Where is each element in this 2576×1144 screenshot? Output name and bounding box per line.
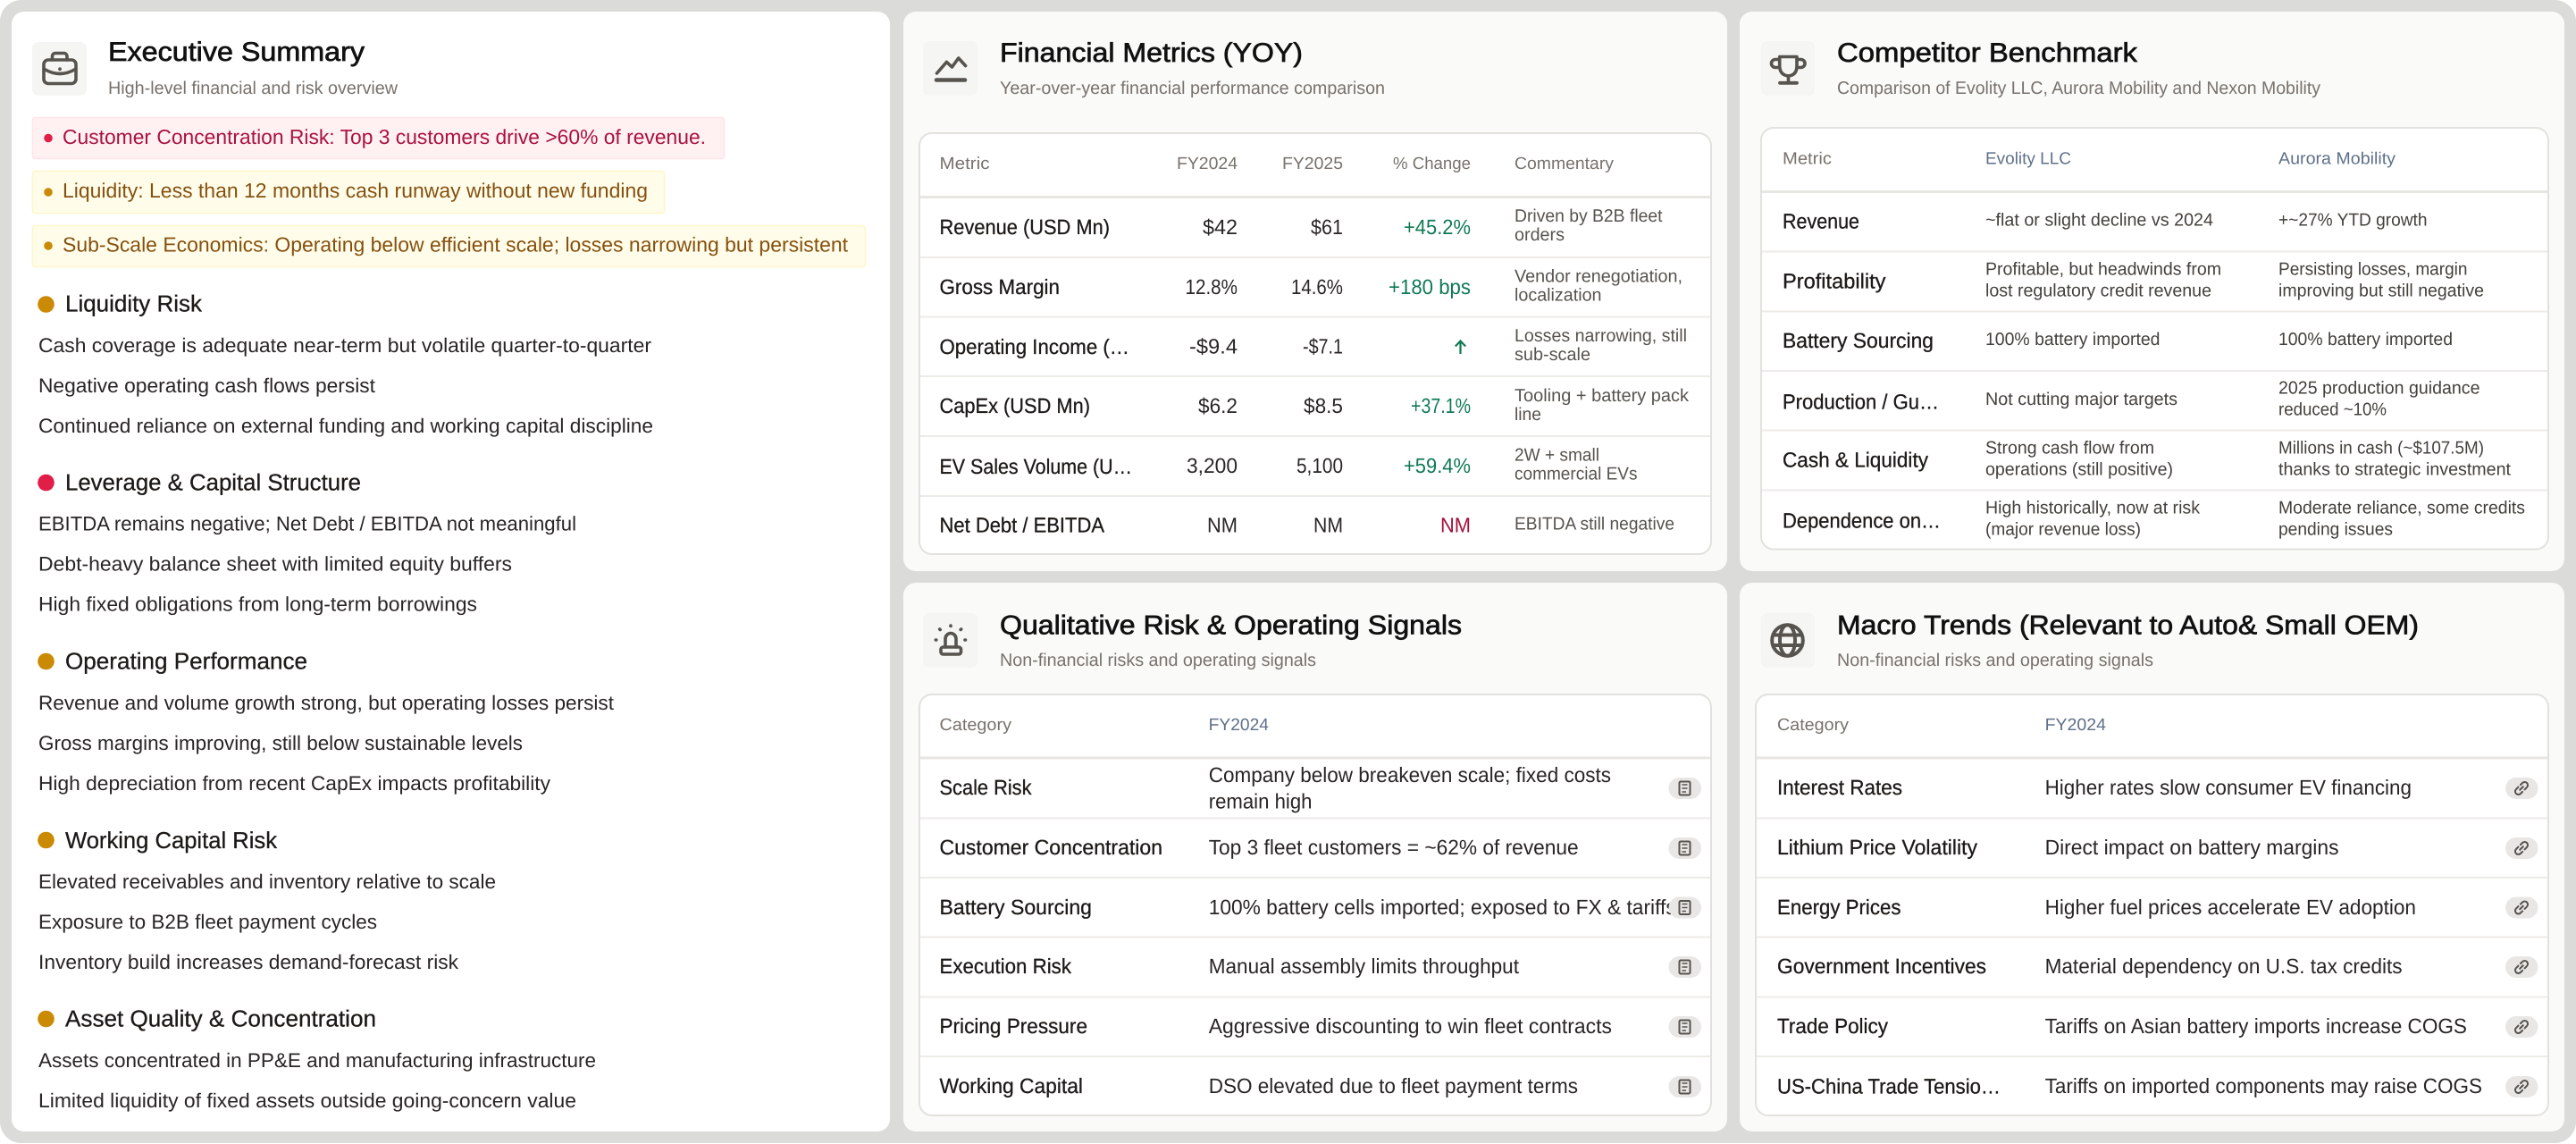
icon: briefcase bbox=[32, 42, 87, 96]
callout: sub-scale economics bbox=[32, 225, 865, 266]
table header: Aurora Mobility bbox=[2278, 150, 2396, 168]
panel: qualitative risk and operating signals bbox=[903, 583, 1727, 1131]
row: us-china trade tensions: Tariffs on imported components may raise COGS bbox=[2045, 1074, 2482, 1098]
icon: link bbox=[2505, 897, 2538, 919]
row: profitability: lost regulatory credit revenue bbox=[1985, 281, 2211, 300]
row: battery sourcing: Battery Sourcing bbox=[940, 896, 1092, 919]
row: interest rates bbox=[1777, 776, 2538, 799]
table header bbox=[940, 716, 1269, 735]
table: macro trends bbox=[1756, 694, 2548, 1115]
row: interest rates: Higher rates slow consumer EV financing bbox=[2045, 776, 2412, 799]
row: capex: +37.1% bbox=[1411, 394, 1471, 417]
row: cash and liquidity: Cash & Liquidity bbox=[1783, 449, 1928, 472]
callout: liquidity: Liquidity: Less than 12 months cash runway without new funding bbox=[63, 179, 648, 202]
row: revenue: $61 bbox=[1311, 215, 1343, 239]
row: revenue: +45.2% bbox=[1404, 215, 1471, 239]
row: revenue: Revenue bbox=[1783, 209, 1859, 232]
row: trade policy bbox=[1777, 1014, 2538, 1038]
icon: trophy bbox=[1761, 41, 1815, 96]
row: profitability: Profitable, but headwinds from bbox=[1985, 259, 2221, 279]
table header bbox=[940, 155, 1615, 173]
row: operating income: -$7.1 bbox=[1303, 334, 1343, 358]
table header: Metric bbox=[940, 155, 990, 173]
section: liquidity risk: Negative operating cash flows persist bbox=[38, 374, 376, 397]
row: gross margin: 12.8% bbox=[1185, 275, 1238, 299]
row: net debt bbox=[940, 513, 1674, 536]
table header: FY2024 bbox=[1177, 155, 1238, 173]
row: cash and liquidity: Strong cash flow from bbox=[1985, 438, 2154, 458]
row: capex bbox=[940, 386, 1690, 425]
callout: liquidity bbox=[32, 172, 665, 213]
row: working capital: DSO elevated due to fleet payment terms bbox=[1209, 1074, 1578, 1098]
row: revenue: Revenue (USD Mn) bbox=[940, 215, 1110, 239]
row: profitability: Persisting losses, margin bbox=[2278, 259, 2468, 279]
section: liquidity risk bbox=[38, 290, 653, 437]
row: ev sales volume: 2W + small bbox=[1515, 445, 1599, 465]
section: liquidity risk: Liquidity Risk bbox=[65, 290, 203, 316]
row: production guidance: Not cutting major targets bbox=[1985, 390, 2177, 409]
panel: macro trends bbox=[1740, 583, 2564, 1131]
table header bbox=[1783, 150, 2396, 168]
row: customer concentration: Customer Concentration bbox=[940, 836, 1162, 859]
row: dependence: Moderate reliance, some credits bbox=[2278, 499, 2525, 518]
section: working capital risk: Working Capital Risk bbox=[65, 827, 278, 854]
row: revenue: +~27% YTD growth bbox=[2278, 211, 2427, 231]
table header: FY2025 bbox=[1282, 155, 1343, 173]
section: leverage and capital structure bbox=[38, 468, 576, 615]
row: revenue bbox=[940, 206, 1663, 245]
table: financial metrics bbox=[919, 133, 1711, 554]
row: revenue: Driven by B2B fleet bbox=[1515, 206, 1663, 226]
row: energy prices: Higher fuel prices accelerate EV adoption bbox=[2045, 896, 2416, 919]
table: qualitative risk bbox=[919, 694, 1711, 1115]
callout: customer concentration risk: Customer Concentration Risk: Top 3 customers drive >60% of revenue. bbox=[63, 125, 706, 148]
row: dependence: Dependence on… bbox=[1783, 509, 1941, 533]
row: government incentives bbox=[1777, 955, 2538, 978]
row: ev sales volume bbox=[940, 445, 1637, 484]
heading: financial metrics: Financial Metrics (YOY) bbox=[1000, 38, 1303, 68]
row: ev sales volume: 5,100 bbox=[1296, 454, 1343, 477]
subtitle: competitor benchmark: Comparison of Evolity LLC, Aurora Mobility and Nexon Mobility bbox=[1837, 79, 2320, 98]
row: gross margin bbox=[940, 266, 1682, 306]
section: asset quality and concentration: Assets concentrated in PP&E and manufacturing infrastructure bbox=[38, 1049, 596, 1072]
icon: globe bbox=[1761, 613, 1815, 668]
row: net debt: Net Debt / EBITDA bbox=[940, 513, 1104, 536]
row: revenue: orders bbox=[1515, 225, 1565, 245]
row: government incentives: Material dependency on U.S. tax credits bbox=[2045, 955, 2403, 978]
table header: Commentary bbox=[1515, 155, 1615, 173]
table header: FY2024 bbox=[1209, 716, 1269, 735]
table header bbox=[1777, 716, 2106, 735]
icon: link bbox=[2505, 1076, 2538, 1098]
row: cash and liquidity bbox=[1783, 438, 2511, 479]
icon: document bbox=[1669, 1016, 1701, 1038]
icon: link bbox=[2505, 778, 2538, 799]
section: operating performance: High depreciation from recent CapEx impacts profitability bbox=[38, 772, 551, 795]
row: capex: $8.5 bbox=[1304, 394, 1343, 417]
row: us-china trade tensions: US-China Trade Tensio… bbox=[1777, 1074, 2001, 1098]
row: customer concentration bbox=[940, 836, 1701, 859]
row: gross margin: Vendor renegotiation, bbox=[1515, 266, 1682, 286]
section: leverage and capital structure: Leverage & Capital Structure bbox=[65, 468, 361, 495]
subtitle: executive summary: High-level financial and risk overview bbox=[108, 79, 399, 98]
row: dependence: (major revenue loss) bbox=[1985, 520, 2141, 540]
row: scale risk: Scale Risk bbox=[940, 776, 1032, 799]
row: cash and liquidity: Millions in cash (~$107.5M) bbox=[2278, 438, 2484, 458]
row: ev sales volume: EV Sales Volume (U… bbox=[940, 455, 1132, 478]
section: asset quality and concentration bbox=[38, 1005, 596, 1112]
table header: FY2024 bbox=[2045, 716, 2106, 735]
row: gross margin: localization bbox=[1515, 286, 1601, 306]
row: gross margin: +180 bps bbox=[1389, 275, 1471, 299]
row: cash and liquidity: thanks to strategic investment bbox=[2278, 459, 2511, 479]
row: gross margin: Gross Margin bbox=[940, 275, 1060, 299]
row: scale risk: remain high bbox=[1209, 790, 1312, 813]
row: us-china trade tensions bbox=[1777, 1074, 2538, 1098]
icon: document bbox=[1669, 837, 1701, 859]
section: working capital risk: Inventory build increases demand-forecast risk bbox=[38, 951, 459, 973]
row: production guidance bbox=[1783, 379, 2480, 420]
row: profitability bbox=[1783, 259, 2484, 300]
icon: document bbox=[1669, 778, 1701, 799]
row: trade policy: Trade Policy bbox=[1777, 1014, 1888, 1038]
row: lithium price volatility: Lithium Price Volatility bbox=[1777, 836, 1977, 859]
row: working capital: Working Capital bbox=[940, 1074, 1083, 1098]
table header: Evolity LLC bbox=[1985, 150, 2071, 168]
heading: competitor benchmark: Competitor Benchmark bbox=[1837, 38, 2138, 68]
section: working capital risk: Elevated receivables and inventory relative to scale bbox=[38, 871, 496, 893]
row: battery sourcing: 100% battery imported bbox=[1985, 330, 2161, 349]
row: working capital bbox=[940, 1074, 1701, 1098]
callout: sub-scale economics: Sub-Scale Economics: Operating below efficient scale; losses narrowing but persistent bbox=[63, 232, 849, 256]
row: interest rates: Interest Rates bbox=[1777, 776, 1902, 799]
row: capex: Tooling + battery pack bbox=[1515, 386, 1690, 406]
row: net debt: NM bbox=[1440, 513, 1471, 536]
row: trade policy: Tariffs on Asian battery imports increase COGS bbox=[2045, 1014, 2467, 1038]
callout: customer concentration risk bbox=[32, 118, 724, 159]
row: capex: line bbox=[1515, 405, 1541, 425]
icon: line chart bbox=[923, 41, 978, 96]
row: dependence: pending issues bbox=[2278, 520, 2393, 540]
row: net debt: NM bbox=[1313, 513, 1343, 536]
row: production guidance: 2025 production guidance bbox=[2278, 379, 2480, 399]
row: pricing pressure: Pricing Pressure bbox=[940, 1014, 1087, 1038]
row: government incentives: Government Incentives bbox=[1777, 955, 1986, 978]
icon: document bbox=[1669, 956, 1701, 978]
icon: document bbox=[1669, 897, 1701, 919]
subtitle: macro trends: Non-financial risks and operating signals bbox=[1837, 651, 2153, 670]
row: pricing pressure bbox=[940, 1014, 1701, 1038]
section: working capital risk: Exposure to B2B fleet payment cycles bbox=[38, 911, 377, 933]
row: production guidance: Production / Gu… bbox=[1783, 390, 1939, 413]
row: ev sales volume: commercial EVs bbox=[1515, 465, 1637, 484]
section: leverage and capital structure: High fixed obligations from long-term borrowings bbox=[38, 593, 477, 615]
section: asset quality and concentration: Asset Quality & Concentration bbox=[65, 1005, 376, 1031]
row: dependence bbox=[1783, 499, 2525, 540]
row: energy prices: Energy Prices bbox=[1777, 896, 1901, 919]
row: operating income bbox=[940, 326, 1687, 365]
subtitle: financial metrics: Year-over-year financial performance comparison bbox=[1000, 79, 1385, 98]
section: liquidity risk: Continued reliance on external funding and working capital discipline bbox=[38, 415, 653, 437]
row: capex: CapEx (USD Mn) bbox=[940, 394, 1090, 417]
row: battery sourcing bbox=[940, 896, 1701, 919]
icon: link bbox=[2505, 837, 2538, 859]
row: customer concentration: Top 3 fleet customers = ~62% of revenue bbox=[1209, 836, 1579, 859]
row: battery sourcing: Battery Sourcing bbox=[1783, 329, 1934, 352]
row: pricing pressure: Aggressive discounting to win fleet contracts bbox=[1209, 1014, 1612, 1038]
table: competitor benchmark bbox=[1761, 128, 2548, 549]
row: energy prices bbox=[1777, 896, 2538, 919]
row: operating income: sub-scale bbox=[1515, 345, 1590, 365]
section: operating performance: Gross margins improving, still below sustainable levels bbox=[38, 732, 523, 754]
row: ev sales volume: +59.4% bbox=[1404, 454, 1471, 477]
row: battery sourcing bbox=[1783, 329, 2453, 352]
row: execution risk: Manual assembly limits throughput bbox=[1209, 955, 1519, 978]
row: scale risk bbox=[940, 763, 1701, 813]
row: operating income: -$9.4 bbox=[1189, 334, 1238, 358]
panel: competitor benchmark bbox=[1740, 12, 2564, 571]
arrow: up bbox=[1456, 341, 1465, 354]
row: battery sourcing: 100% battery imported bbox=[2278, 330, 2453, 349]
section: operating performance: Operating Performance bbox=[65, 647, 307, 674]
section: liquidity risk: Cash coverage is adequate near-term but volatile quarter-to-quarter bbox=[38, 334, 652, 357]
icon: document bbox=[1669, 1076, 1701, 1098]
row: revenue: ~flat or slight decline vs 2024 bbox=[1985, 211, 2213, 231]
row: profitability: Profitability bbox=[1783, 270, 1886, 293]
section: asset quality and concentration: Limited liquidity of fixed assets outside going-concern value bbox=[38, 1089, 576, 1112]
icon: link bbox=[2505, 956, 2538, 978]
row: dependence: High historically, now at risk bbox=[1985, 499, 2201, 518]
subtitle: qualitative risk: Non-financial risks and operating signals bbox=[1000, 651, 1316, 670]
section: operating performance bbox=[38, 647, 615, 795]
row: revenue bbox=[1783, 209, 2427, 232]
icon: link bbox=[2505, 1016, 2538, 1038]
row: revenue: $42 bbox=[1203, 215, 1238, 239]
row: operating income: Losses narrowing, still bbox=[1515, 326, 1687, 346]
row: gross margin: 14.6% bbox=[1291, 275, 1343, 299]
table header: % Change bbox=[1393, 155, 1471, 173]
row: net debt: NM bbox=[1207, 513, 1238, 536]
row: scale risk: Company below breakeven scale; fixed costs bbox=[1209, 763, 1611, 786]
section: working capital risk bbox=[38, 827, 496, 973]
row: net debt: EBITDA still negative bbox=[1515, 515, 1674, 534]
row: battery sourcing: 100% battery cells imported; exposed to FX & tariffs bbox=[1209, 896, 1676, 919]
table header: Metric bbox=[1783, 150, 1832, 168]
row: cash and liquidity: operations (still positive) bbox=[1985, 459, 2173, 479]
row: ev sales volume: 3,200 bbox=[1187, 454, 1238, 477]
row: lithium price volatility bbox=[1777, 836, 2538, 859]
row: operating income: Operating Income (… bbox=[940, 335, 1129, 358]
row: lithium price volatility: Direct impact on battery margins bbox=[2045, 836, 2339, 859]
heading: executive summary: Executive Summary bbox=[108, 38, 365, 67]
row: profitability: improving but still negative bbox=[2278, 281, 2484, 300]
panel: executive summary bbox=[12, 12, 890, 1131]
row: production guidance: reduced ~10% bbox=[2278, 400, 2387, 420]
section: operating performance: Revenue and volume growth strong, but operating losses persist bbox=[38, 692, 615, 714]
row: execution risk bbox=[940, 955, 1701, 978]
section: leverage and capital structure: Debt-heavy balance sheet with limited equity buffers bbox=[38, 552, 512, 576]
heading: qualitative risk: Qualitative Risk & Operating Signals bbox=[1000, 611, 1462, 640]
table header: Category bbox=[1777, 716, 1850, 735]
table header: Category bbox=[940, 716, 1012, 735]
section: leverage and capital structure: EBITDA remains negative; Net Debt / EBITDA not meaningful bbox=[38, 513, 576, 534]
panel: financial metrics bbox=[903, 12, 1727, 571]
icon: siren bbox=[923, 613, 978, 668]
row: capex: $6.2 bbox=[1198, 394, 1238, 417]
heading: macro trends: Macro Trends (Relevant to Auto& Small OEM) bbox=[1837, 611, 2419, 640]
row: execution risk: Execution Risk bbox=[940, 955, 1071, 978]
